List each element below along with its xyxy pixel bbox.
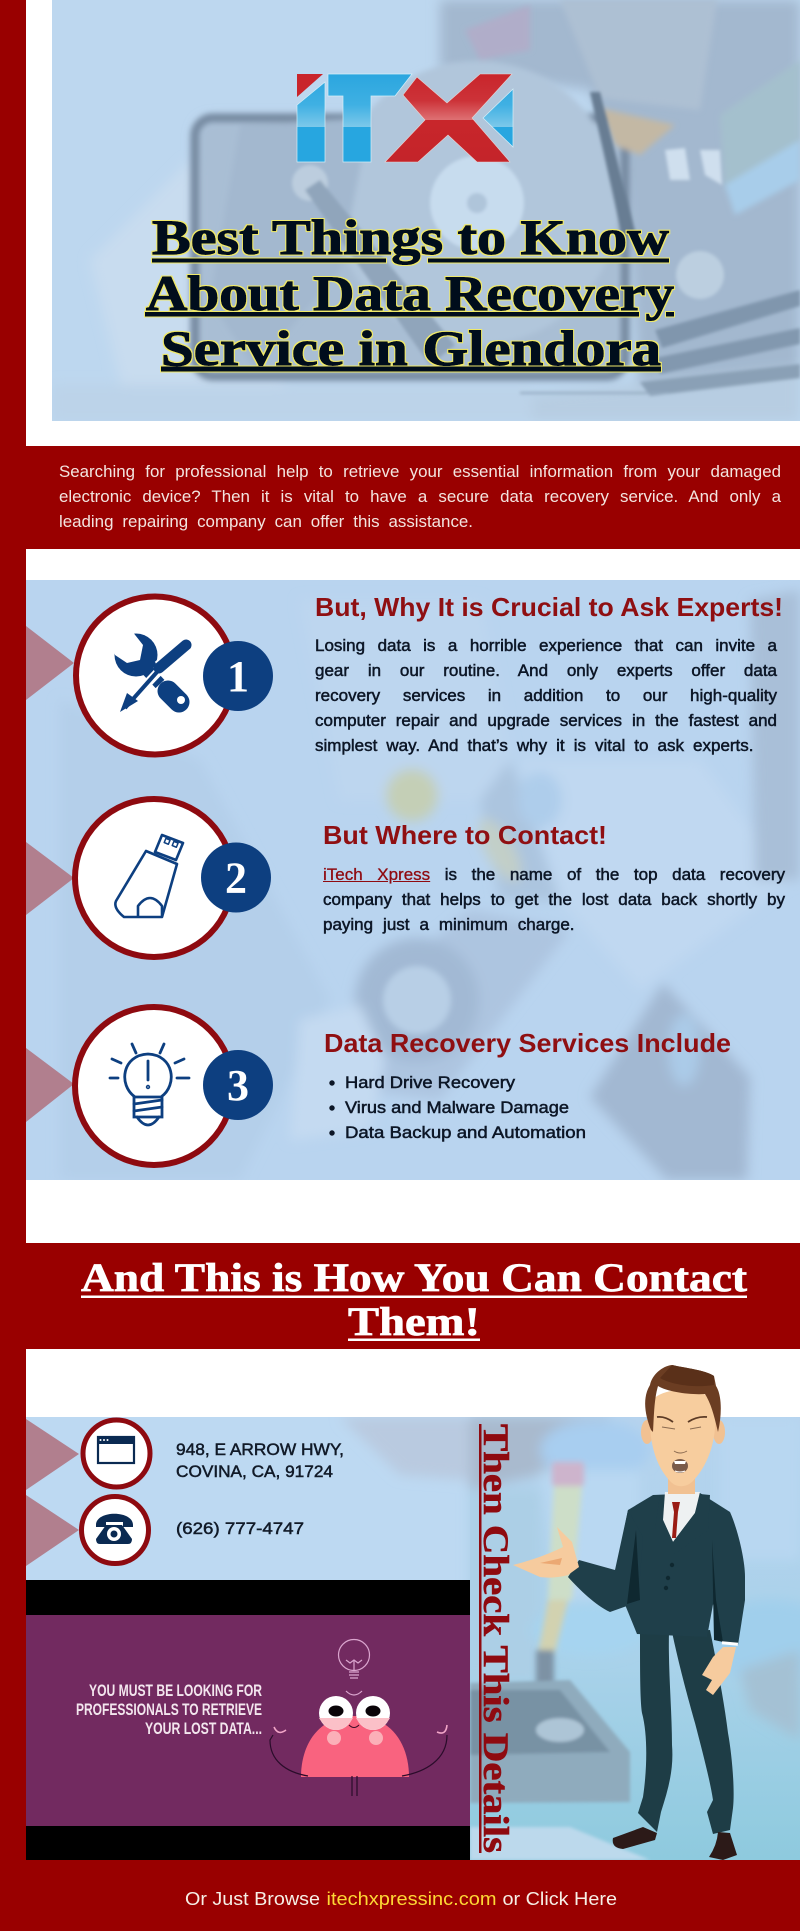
number badge 2	[201, 842, 271, 912]
text: contact paragraph: company that helps to get the lost data back shortly by	[323, 890, 785, 909]
text: experts paragraph: simplest way. And that’s why it is vital to ask experts.	[315, 736, 754, 755]
icon: pink cartoon character	[270, 1640, 447, 1796]
text: experts paragraph: computer repair and upgrade services in the fastest and	[315, 711, 777, 730]
arrow: address pointer	[26, 1419, 79, 1490]
text: video caption: PROFESSIONALS TO RETRIEVE	[76, 1700, 262, 1719]
title: Best Things to Know	[152, 209, 669, 265]
title: About Data Recovery	[146, 265, 674, 321]
heading: why ask experts: But, Why It is Crucial to Ask Experts!	[315, 592, 783, 622]
panel: contact background	[26, 1417, 800, 1861]
arrow: pointer 2	[26, 842, 74, 915]
heading band: how to contact: Them!	[348, 1299, 480, 1344]
icon: usb drive badge	[75, 799, 233, 957]
number badge 3	[203, 1050, 273, 1120]
heading: where to contact: But Where to Contact!	[323, 820, 607, 850]
footer text: Or Just Browse	[185, 1889, 320, 1909]
list: services	[330, 1073, 586, 1142]
footer text: itechxpressinc.com	[326, 1889, 496, 1909]
icon: wrench and screwdriver badge	[76, 596, 234, 754]
text: experts paragraph: recovery services in addition to our high-quality	[315, 686, 777, 705]
title: Service in Glendora	[161, 320, 661, 376]
text: address and phone: (626) 777-4747	[176, 1519, 304, 1538]
number badge 2: 2	[225, 854, 247, 902]
logo: ITX	[297, 74, 513, 162]
panel: intro band	[26, 446, 800, 549]
panel: video thumbnail	[26, 1580, 470, 1861]
arrow: phone pointer	[26, 1495, 79, 1566]
text: experts paragraph: gear in our routine. And only experts offer data	[315, 661, 777, 680]
number badge 3: 3	[227, 1061, 249, 1110]
text: contact paragraph	[323, 865, 786, 934]
arrow: pointer 1	[26, 626, 74, 700]
heading: services include: Data Recovery Services Include	[324, 1028, 731, 1058]
heading band: how to contact: And This is How You Can Contact	[81, 1255, 748, 1300]
panel: why, where and services background	[26, 580, 800, 1180]
text: intro paragraph: Searching for professional help to retrieve your essential information from your damaged	[59, 462, 781, 481]
title	[145, 209, 674, 376]
vertical text: then check this details: Then Check This Details	[476, 1424, 516, 1853]
text: address and phone	[176, 1440, 344, 1538]
text: video caption	[76, 1681, 262, 1738]
text: experts paragraph	[315, 636, 778, 755]
list: services: Hard Drive Recovery	[345, 1073, 516, 1092]
arrow: pointer 3	[26, 1048, 74, 1122]
list: services: Data Backup and Automation	[345, 1123, 586, 1142]
text: experts paragraph: Losing data is a horrible experience that can invite a	[315, 636, 777, 655]
list: services: Virus and Malware Damage	[345, 1098, 569, 1117]
text: intro paragraph: leading repairing company can offer this assistance.	[59, 512, 473, 531]
text: intro paragraph: electronic device? Then it is vital to have a secure data recovery service. And only a	[59, 487, 781, 506]
footer band	[0, 1860, 800, 1931]
footer text: or Click Here	[502, 1889, 617, 1909]
text: contact paragraph: iTech Xpress is the name of the top data recovery	[323, 865, 785, 884]
text: video caption: YOUR LOST DATA...	[145, 1719, 262, 1738]
panel: hero background photo	[52, 0, 800, 421]
icon: browser window badge	[83, 1420, 150, 1487]
left red side bar	[0, 0, 26, 1931]
footer text	[185, 1889, 617, 1909]
number badge 1	[203, 641, 273, 711]
heading band: how to contact	[26, 1243, 800, 1349]
text: video caption: YOU MUST BE LOOKING FOR	[89, 1681, 262, 1700]
illustration: man in suit	[513, 1365, 745, 1860]
text: address and phone: 948, E ARROW HWY,	[176, 1440, 344, 1459]
text: contact paragraph: paying just a minimum charge.	[323, 915, 574, 934]
text: address and phone: COVINA, CA, 91724	[176, 1462, 333, 1481]
number badge 1: 1	[227, 652, 249, 701]
icon: light bulb badge	[75, 1007, 233, 1165]
text: intro paragraph	[59, 462, 782, 531]
icon: telephone badge	[82, 1496, 148, 1564]
